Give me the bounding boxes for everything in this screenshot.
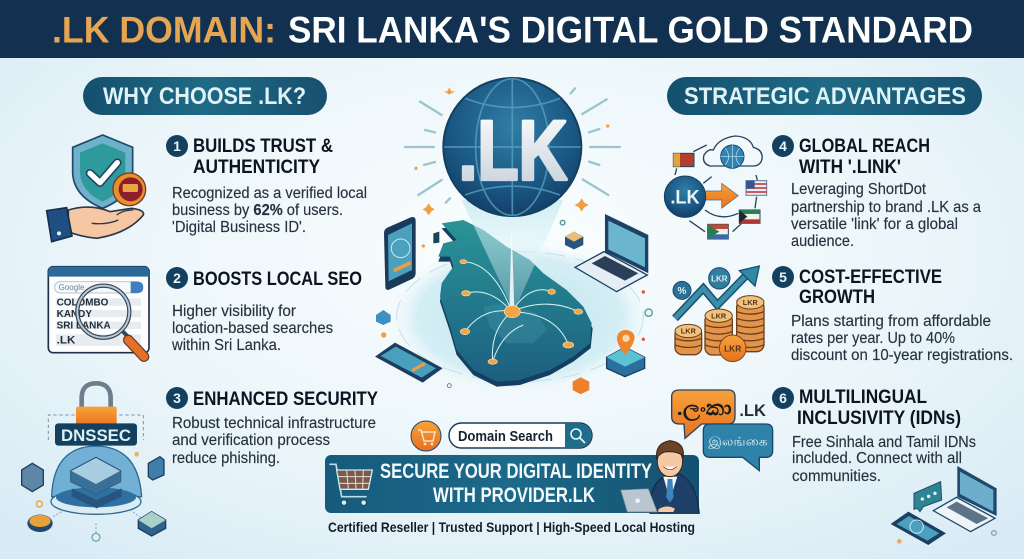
item 6: multilingual inclusivity: communities. (792, 468, 881, 485)
item 2: boosts local seo: location-based searches (172, 320, 333, 337)
item 6: multilingual inclusivity: INCLUSIVITY (IDNs) (797, 408, 961, 429)
icon: map pin on box (607, 330, 645, 377)
item 2: boosts local seo: within Sri Lanka. (171, 337, 281, 354)
item 4: global reach: versatile 'link' for a global (791, 216, 958, 233)
heading pill: strategic advantages: STRATEGIC ADVANTAGES (684, 83, 966, 110)
globe (443, 78, 581, 216)
item 4: global reach: audience. (791, 233, 854, 250)
item 1: builds trust: 'Digital Business ID'. (172, 219, 306, 236)
item 5: cost-effective growth: discount on 10-year registrations. (791, 347, 1013, 364)
heading pill: strategic advantages (667, 77, 982, 115)
item 6: multilingual inclusivity: Free Sinhala and Tamil IDNs (792, 434, 976, 451)
icon: coins and growth arrow: LKR (743, 298, 759, 307)
icon: search results with magnifier (48, 267, 149, 357)
item 2: boosts local seo: 2 (173, 270, 181, 286)
icon: DNSSEC lock and dome: DNSSEC (61, 426, 131, 445)
item 4: global reach: partnership to brand .LK as a (791, 199, 981, 216)
item 5: cost-effective growth: Plans starting from affordable (791, 313, 991, 330)
heading pill: why choose (83, 77, 327, 115)
panel: why choose .LK (22, 77, 378, 541)
item 4: global reach (772, 135, 981, 250)
item 5: cost-effective growth: 5 (779, 269, 787, 285)
item 1: builds trust: BUILDS TRUST & (193, 136, 333, 157)
banner (325, 441, 699, 513)
map: Sri Lanka (438, 220, 593, 387)
item 5: cost-effective growth: rates per year. Up to 40% (791, 330, 955, 347)
icon: coins and growth arrow: LKR (681, 327, 697, 336)
icon: phone (384, 217, 416, 290)
icon: global reach: .LK (670, 188, 700, 209)
title: .LK DOMAIN: (52, 10, 276, 50)
network arcs (463, 262, 578, 362)
item 3: enhanced security: ENHANCED SECURITY (193, 389, 378, 410)
item 6: multilingual inclusivity: included. Connect with all (792, 450, 962, 467)
tagline: Certified Reseller | Trusted Support | High-Speed Local Hosting (328, 519, 695, 535)
icon: search results with magnifier: .LK (57, 335, 75, 347)
icon: shield in hand (47, 135, 146, 242)
item 1: builds trust (166, 135, 367, 236)
icon: multilingual speech bubbles (672, 390, 773, 471)
icon: small cubes (376, 220, 652, 394)
icon: search results with magnifier: KANDY (57, 309, 92, 320)
icon: businessman with laptop (621, 441, 699, 513)
item 5: cost-effective growth (772, 266, 1013, 364)
icon: search results with magnifier: SRI LANKA (57, 320, 111, 331)
icon: coins and growth arrow: % (678, 286, 687, 297)
item 4: global reach: WITH '.LINK' (799, 157, 901, 178)
item 3: enhanced security (166, 387, 378, 467)
central illustration: globe over Sri Lanka map (375, 78, 652, 394)
item 5: cost-effective growth: COST-EFFECTIVE (799, 267, 942, 288)
ground disc (392, 242, 648, 392)
globe label: .LK (459, 103, 567, 197)
item 6: multilingual inclusivity: 6 (779, 390, 787, 406)
icon: DNSSEC lock and dome (22, 383, 166, 541)
title: SRI LANKA'S DIGITAL GOLD STANDARD (288, 10, 973, 50)
icon: global reach (664, 136, 767, 239)
network nodes (460, 260, 583, 364)
item 4: global reach: 4 (779, 138, 787, 154)
icon: multilingual speech bubbles: .LK (739, 401, 766, 420)
icon: search results with magnifier: Google (59, 283, 85, 292)
icon: multilingual speech bubbles: .ලංකා (677, 397, 732, 422)
icon: shopping cart (329, 464, 372, 505)
item 2: boosts local seo: Higher visibility for (172, 303, 297, 320)
item 3: enhanced security: Robust technical infrastructure (172, 415, 376, 432)
item 4: global reach: GLOBAL REACH (799, 136, 930, 157)
light beam (462, 200, 563, 312)
item 2: boosts local seo (166, 267, 362, 354)
item 1: builds trust: 1 (173, 138, 181, 154)
banner text: SECURE YOUR DIGITAL IDENTITY (380, 460, 652, 483)
icon: orange cart button (411, 421, 441, 451)
item 2: boosts local seo: BOOSTS LOCAL SEO (193, 269, 362, 290)
icon: laptop and phone, bottom right (891, 466, 997, 545)
icon: coins and growth arrow (673, 266, 764, 362)
item 3: enhanced security: reduce phishing. (172, 450, 280, 467)
icon: small phone (375, 343, 443, 383)
item 4: global reach: Leveraging ShortDot (791, 181, 927, 198)
rays (405, 88, 620, 203)
header band (0, 0, 1024, 58)
banner text: WITH PROVIDER.LK (433, 484, 595, 507)
icon: multilingual speech bubbles: இலங்கை (708, 434, 768, 449)
item 5: cost-effective growth: GROWTH (799, 287, 875, 308)
call to action (325, 421, 699, 535)
item 6: multilingual inclusivity (772, 387, 976, 485)
item 1: builds trust: business by 62% of users. (172, 202, 343, 219)
icon: search results with magnifier: COLOMBO (57, 298, 109, 309)
item 6: multilingual inclusivity: MULTILINGUAL (799, 387, 927, 408)
banner text (380, 460, 652, 507)
item 1: builds trust: Recognized as a verified local (172, 185, 367, 202)
item 1: builds trust: AUTHENTICITY (193, 157, 320, 178)
item 3: enhanced security: and verification process (172, 432, 330, 449)
search box (449, 423, 592, 448)
icon: coins and growth arrow: LKR (711, 311, 727, 320)
sparkles (381, 87, 645, 341)
search box: Domain Search (458, 428, 553, 445)
icon: coins and growth arrow: LKR (724, 343, 741, 353)
icon: laptop (575, 214, 648, 292)
panel: strategic advantages (664, 77, 1013, 545)
icon: coins and growth arrow: LKR (711, 274, 728, 283)
heading pill: why choose: WHY CHOOSE .LK? (103, 83, 306, 110)
item 3: enhanced security: 3 (173, 390, 181, 406)
